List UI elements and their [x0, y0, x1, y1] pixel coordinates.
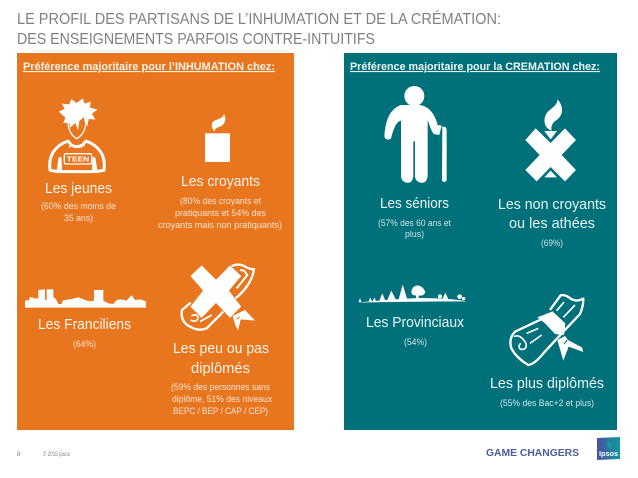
text: les provinciaux: (54%): [404, 337, 427, 347]
title: DES ENSEIGNEMENTS PARFOIS CONTRE-INTUITIFS: [17, 31, 375, 48]
text: les peu ou pas diplomes: (59% des personnes sans: [171, 382, 270, 392]
icon: candle: [205, 114, 230, 162]
text: les peu ou pas diplomes: Les peu ou pas: [173, 340, 269, 357]
text: les croyants: (80% des croyants et: [180, 196, 261, 206]
text: les plus diplomes: (55% des Bac+2 et plus): [500, 398, 594, 408]
text: les franciliens: (64%): [73, 339, 96, 349]
game changers tagline: GAME CHANGERS: [486, 447, 579, 459]
text: les franciliens: [38, 316, 131, 349]
text: les jeunes: Les jeunes: [45, 180, 112, 197]
text: les peu ou pas diplomes: diplômés: [191, 360, 250, 377]
text: les seniors: Les séniors: [380, 195, 449, 212]
text: les croyants: Les croyants: [181, 173, 260, 190]
text: les seniors: (57% des 60 ans et: [378, 218, 451, 228]
footer page number and copyright: [17, 451, 70, 458]
icon: teen: [50, 98, 104, 172]
text: les peu ou pas diplomes: [171, 340, 272, 416]
text: les seniors: plus): [405, 229, 424, 239]
text: les croyants: pratiquants et 54% des: [175, 208, 266, 218]
text: les croyants: croyants mais non pratiquants): [158, 220, 282, 230]
title: LE PROFIL DES PARTISANS DE L’INHUMATION ET DE LA CRÉMATION:: [17, 9, 501, 28]
text: les plus diplomes: Les plus diplômés: [490, 375, 604, 392]
icon: crossed candle: [525, 99, 576, 181]
text: les plus diplomes: [490, 375, 604, 408]
text: les provinciaux: [366, 314, 464, 347]
panel: inhumation: [17, 53, 294, 430]
panel heading: inhumation: Préférence majoritaire pour l’INHUMATION chez:: [23, 61, 275, 73]
panel heading: cremation: Préférence majoritaire pour la CREMATION chez:: [350, 61, 600, 73]
text: les franciliens: Les Franciliens: [38, 316, 131, 333]
icon: senior with cane: [384, 86, 447, 183]
icon: crossed diploma: [182, 265, 255, 331]
text: les non croyants: Les non croyants: [498, 196, 606, 213]
text: les peu ou pas diplomes: BEPC / BEP / CAP / CEP): [173, 406, 268, 416]
text: les seniors: [378, 195, 451, 239]
icon: diploma: [510, 295, 583, 365]
text: les jeunes: (60% des moins de: [41, 201, 116, 211]
text: les provinciaux: Les Provinciaux: [366, 314, 464, 331]
footer page number and copyright: © 2015 Ipsos: [43, 451, 70, 458]
panel: cremation: [344, 53, 617, 430]
logo: ipsos: Ipsos: [599, 449, 618, 458]
footer page number and copyright: 8: [17, 452, 21, 458]
text: les non croyants: (69%): [541, 238, 563, 248]
text: les jeunes: 35 ans): [64, 213, 93, 223]
icon: countryside: [357, 285, 467, 303]
title: [17, 9, 501, 48]
icon: teen: TEEN: [67, 155, 89, 164]
text: les jeunes: [41, 180, 116, 223]
text: les peu ou pas diplomes: diplôme, 51% des niveaux: [172, 394, 272, 404]
text: les croyants: [158, 173, 282, 230]
icon: city skyline: [25, 289, 146, 308]
text: les non croyants: [498, 196, 606, 248]
logo: ipsos: [597, 437, 620, 460]
text: les non croyants: ou les athées: [509, 215, 595, 232]
